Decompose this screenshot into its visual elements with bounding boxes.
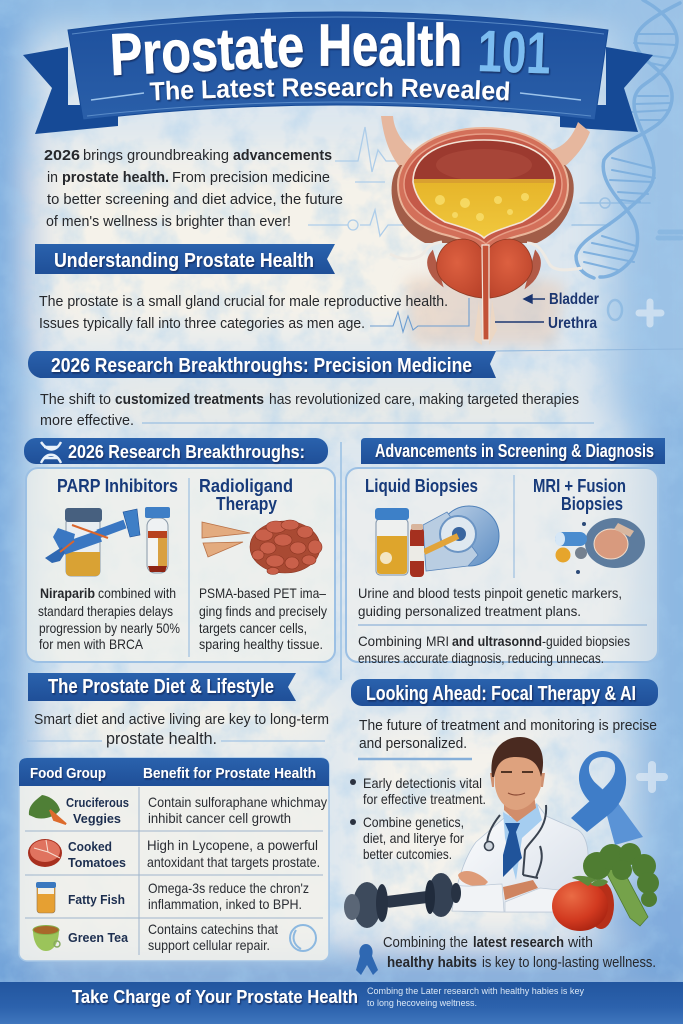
illustration: apple: [552, 876, 614, 931]
bullet list: [350, 775, 486, 862]
text: PSMA: PSMA-based PET ima–: [199, 585, 326, 601]
intro text: From precision medicine: [172, 169, 330, 186]
icon: tea cup: [33, 926, 60, 951]
heading: precision medicine: [28, 349, 683, 378]
text: Niraparib: combined with: [98, 585, 176, 601]
intro text: 2026: [44, 147, 80, 164]
text: liquid biopsies: [358, 585, 622, 619]
intro text: [44, 147, 343, 230]
precision medicine text: customized treatments: [115, 391, 264, 408]
bullet list: for effective treatment.: [363, 791, 486, 807]
icon: radioligand beam and tumour: [202, 520, 322, 574]
neck and face: [504, 795, 536, 822]
header pill: [24, 438, 328, 464]
illustration: ECG lines behind bladder: [308, 127, 405, 236]
heading: diet and lifestyle: The Prostate Diet & Lifestyle: [48, 676, 274, 698]
stethoscope: [487, 805, 546, 878]
icon: PARP jar, tube and ribbon: [45, 507, 170, 576]
closing text: healthy habits: [387, 954, 477, 971]
row: cruciferous veggies: Veggies: [73, 811, 121, 826]
text: Niraparib: progression by nearly 50%: [39, 620, 180, 636]
understanding text: The prostate is a small gland crucial for male reproductive health.: [39, 293, 448, 310]
text: PSMA: sparing healthy tissue.: [199, 636, 323, 652]
text: liquid biopsies: guiding personalized treatment plans.: [358, 603, 581, 619]
table header: [19, 758, 329, 786]
bullet list: better cutcomies.: [363, 846, 452, 862]
panel: research breakthroughs: [24, 438, 335, 662]
closing text: Combining the: [383, 934, 468, 951]
heading: Radioligand: [199, 476, 293, 514]
table header: Food Group: [30, 765, 106, 782]
row: cruciferous veggies: [29, 794, 327, 826]
icon: jar and scanner: [375, 506, 499, 577]
row: cooked tomatoes: antoxidant that targets prostate.: [147, 854, 320, 870]
labels: bladder and urethra: Bladder: [549, 291, 599, 308]
text: Niraparib: standard therapies delays: [38, 603, 173, 619]
row: cooked tomatoes: Cooked: [68, 839, 112, 854]
text: Niraparib: [38, 585, 180, 652]
illustration: bladder and prostate: [381, 116, 590, 345]
title: Health: [318, 12, 462, 78]
outer wall dark: [392, 165, 574, 243]
closing text: with: [567, 934, 593, 951]
icon: small ribbon: [356, 944, 378, 975]
row: cruciferous veggies: Cruciferous: [66, 795, 129, 810]
row: cruciferous veggies: Contain sulforaphane whichmay: [148, 794, 327, 810]
row: green tea: [33, 921, 316, 953]
labels: bladder and urethra: Urethra: [548, 315, 597, 332]
text: MRI biopsies: and ultrasonnd: [452, 633, 542, 649]
title: [109, 12, 552, 88]
intro text: in: [47, 169, 58, 186]
text: MRI biopsies: -guided biopsies: [542, 633, 630, 649]
diet text: prostate health.: [106, 730, 217, 748]
intro text: to better screening and diet advice, the future: [47, 191, 343, 208]
coat: [452, 805, 588, 912]
heading: PARP: PARP Inhibitors: [57, 476, 178, 496]
looking ahead text: [358, 717, 657, 759]
title: 101: [477, 18, 552, 87]
card: [26, 468, 335, 662]
arms: [458, 871, 488, 888]
footer: Combing the Later research with healthy habies is key: [367, 986, 584, 996]
intro text: brings groundbreaking: [83, 147, 229, 164]
text: PSMA: ging finds and precisely: [199, 603, 327, 619]
hair: [491, 737, 543, 777]
footer: Take Charge of Your Prostate Health: [72, 987, 358, 1007]
banner body: [68, 12, 608, 120]
illustration: broccoli: [583, 843, 659, 926]
bladder wall: [398, 128, 568, 250]
row: cooked tomatoes: High in Lycopene, a powerful: [147, 837, 318, 853]
intro text: of men's wellness is brighter than ever!: [46, 213, 291, 230]
row: cruciferous veggies: inhibit cancer cell growth: [148, 810, 291, 826]
urethra: [482, 245, 489, 340]
banner: [23, 12, 653, 134]
text: MRI biopsies: Combining: [358, 633, 422, 649]
tissue below: [405, 275, 565, 345]
heading: Radioligand: Therapy: [216, 494, 277, 514]
diet text: Smart diet and active living are key to long-term: [34, 711, 329, 728]
row: fatty fish: [36, 880, 309, 913]
row: green tea: Green Tea: [68, 930, 129, 945]
icon: MRI fusion: [555, 518, 645, 574]
closing text: [356, 934, 656, 975]
bullet list: diet, and literye for: [363, 830, 464, 846]
precision medicine text: [40, 391, 594, 429]
icon: jar: [36, 882, 56, 913]
line: urethra: [495, 321, 544, 323]
illustration: awareness ribbon: [571, 751, 643, 845]
intro text: advancements: [233, 147, 332, 164]
arrow: bladder: [524, 295, 545, 303]
heading: diet and lifestyle: [28, 673, 296, 701]
heading: MRI + Fusion: [533, 476, 626, 514]
row: green tea: Contains catechins that: [148, 921, 278, 937]
looking ahead text: and personalized.: [359, 735, 467, 752]
bladder lumen: [414, 140, 554, 237]
heading: Understanding Prostate Health: Understanding Prostate Health: [54, 250, 314, 272]
text: MRI biopsies: [358, 633, 630, 666]
heading: Liquid Biopsies: Liquid Biopsies: [365, 476, 478, 496]
understanding text: Issues typically fall into three categories as men age.: [39, 315, 365, 332]
heading: precision medicine: 2026 Research Breakthroughs: Precision Medicine: [51, 355, 472, 377]
precision medicine text: The shift to: [40, 391, 111, 408]
panel: screening and diagnosis: [346, 438, 665, 666]
precision medicine text: more effective.: [40, 412, 134, 429]
illustration: dumbbell: [344, 873, 461, 928]
closing text: latest research: [473, 934, 564, 951]
closing text: is key to long-lasting wellness.: [482, 954, 656, 971]
bullet list: Early detectionis vital: [363, 775, 482, 791]
text: PSMA: [199, 585, 327, 652]
heading: Radioligand: Radioligand: [199, 476, 293, 496]
row: fatty fish: inflammation, inked to BPH.: [148, 896, 302, 912]
diet text: [27, 711, 329, 748]
intro text: prostate health.: [62, 169, 169, 186]
footer: to long hecoveing weltness.: [367, 998, 477, 1008]
footer: [0, 982, 683, 1024]
heading: MRI + Fusion: MRI + Fusion: [533, 476, 626, 496]
text: MRI biopsies: MRI: [426, 633, 449, 649]
side tissue: [429, 254, 539, 284]
understanding text: [39, 293, 448, 332]
row: fatty fish: Fatty Fish: [68, 892, 125, 907]
subtitle: The Latest Research Revealed: [150, 77, 511, 102]
row: green tea: support cellular repair.: [148, 937, 270, 953]
banner left tail: [23, 47, 118, 134]
row: fatty fish: Omega-3s reduce the chron'z: [148, 880, 309, 896]
icon: DNA: [41, 442, 61, 463]
illustration: doctor: [452, 737, 588, 912]
text: MRI biopsies: ensures accurate diagnosis, reducing unnecas.: [358, 650, 604, 666]
heading: MRI + Fusion: Biopsies: [561, 494, 623, 514]
icon: veggies: [29, 795, 66, 824]
row: cooked tomatoes: [28, 837, 320, 870]
bullet list: Combine genetics,: [363, 814, 464, 830]
labels: bladder and urethra: [495, 291, 599, 332]
looking ahead text: The future of treatment and monitoring is precise: [359, 717, 657, 734]
row: cooked tomatoes: Tomatoes: [68, 855, 126, 870]
tubes: [390, 242, 582, 270]
ureters: [381, 116, 590, 170]
heading: Understanding Prostate Health: [35, 244, 335, 274]
text: PSMA: targets cancer cells,: [199, 620, 307, 636]
precision medicine text: has revolutionized care, making targeted therapies: [269, 391, 579, 408]
title: Prostate: [109, 13, 305, 88]
prostate lobes: [437, 239, 482, 298]
icon: cell circle: [290, 925, 316, 951]
header pill: 2026 Research Breakthroughs:: [68, 441, 305, 462]
text: Niraparib: for men with BRCA: [39, 636, 144, 652]
table: food groups: [19, 758, 329, 961]
card: [346, 468, 658, 662]
collar and tie: [503, 803, 542, 880]
text: Niraparib: Niraparib: [40, 585, 95, 601]
icon: tomato: [28, 839, 62, 867]
banner right tail: [560, 47, 653, 132]
text: liquid biopsies: Urine and blood tests pinpoit genetic markers,: [358, 585, 622, 601]
decorative DNA helix: [572, 0, 682, 789]
table header: Benefit for Prostate Health: [143, 765, 316, 782]
